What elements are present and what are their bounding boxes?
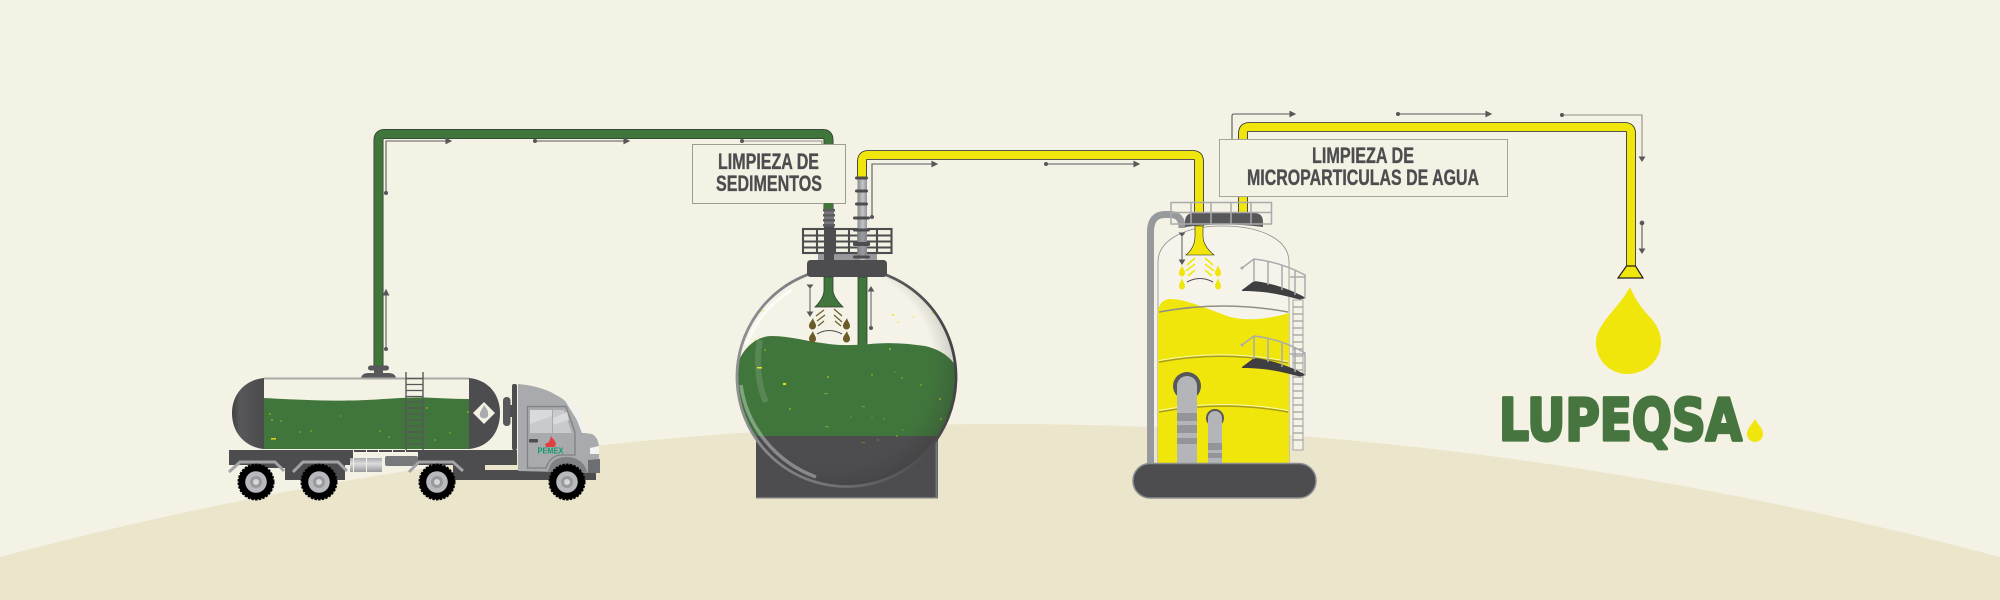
ladder — [406, 372, 423, 450]
inner return pipe — [858, 277, 867, 347]
tower cap — [1185, 213, 1263, 227]
outlet collar base — [818, 254, 877, 262]
top fitting — [361, 366, 396, 378]
door handle — [529, 439, 538, 442]
sphere contents — [738, 336, 955, 486]
yellow pipe: vessel to tower — [862, 155, 1199, 226]
yellow pipes through cap — [1195, 197, 1247, 213]
icon: large yellow drop — [1596, 287, 1661, 374]
tank end caps — [232, 378, 264, 449]
tower base — [1133, 464, 1316, 498]
side pipe — [1150, 214, 1182, 463]
small internal pipe — [1206, 409, 1224, 463]
ground hill — [0, 424, 2000, 600]
water drops and spray — [1179, 258, 1221, 290]
large internal pipe — [1173, 372, 1201, 463]
tower body — [1158, 226, 1289, 463]
logo: lupeqsa: LUPEQSA — [1499, 386, 1742, 454]
panel: sediment vessel — [730, 176, 970, 498]
label: limpieza de sedimentos: SEDIMENTOS — [716, 171, 822, 196]
green pipe — [378, 134, 828, 366]
sphere interior — [738, 268, 956, 486]
truck — [229, 366, 600, 500]
yellow pipe: tower to drop — [1243, 127, 1631, 267]
vessel cap — [807, 260, 887, 277]
sphere ring — [737, 268, 956, 486]
ladder — [1293, 300, 1303, 450]
glass specks — [747, 310, 934, 339]
label: limpieza de microparticulas de agua: LIMPIEZA DE — [1312, 143, 1414, 168]
down arrow — [1180, 233, 1184, 264]
pemex logo — [538, 436, 564, 456]
flow arrows — [384, 112, 1644, 350]
vessel stand — [756, 436, 938, 498]
tower liquid — [1158, 299, 1289, 463]
label: limpieza de microparticulas de agua: MICROPARTICULAS DE AGUA — [1247, 165, 1479, 190]
upper platform — [1240, 259, 1306, 300]
hazard diamond — [473, 402, 495, 424]
chassis — [229, 450, 596, 480]
label: limpieza de sedimentos: LIMPIEZA DE — [718, 149, 819, 174]
tank body — [264, 378, 469, 449]
lower platform — [1240, 336, 1306, 376]
up arrow — [868, 287, 874, 330]
label: limpieza de sedimentos — [692, 144, 846, 204]
cab windows — [530, 410, 572, 433]
yellow pipe tail — [1195, 220, 1203, 230]
yellow specks — [754, 339, 942, 437]
fenders — [229, 462, 463, 472]
pemex logo: PEMEX — [538, 446, 564, 456]
spray nozzle — [815, 277, 843, 307]
yellow specks — [265, 407, 469, 458]
tank liquid — [264, 397, 469, 449]
exhaust and filter — [512, 384, 517, 450]
panel: microparticle tower — [1133, 197, 1316, 498]
spray nozzle — [1186, 226, 1214, 255]
tower ribs — [1159, 306, 1288, 412]
green pipe grey section — [823, 203, 835, 260]
glass shading — [738, 268, 956, 486]
wheels — [238, 464, 584, 500]
icon: pipe outlet nozzle — [1618, 266, 1643, 278]
icon: logo drop — [1747, 419, 1763, 442]
cab — [518, 384, 599, 473]
down arrow — [808, 285, 812, 316]
top railing — [1171, 202, 1272, 224]
dim specks — [824, 371, 904, 443]
grating — [803, 229, 892, 253]
fuel tank — [350, 458, 382, 472]
label: limpieza de microparticulas de agua — [1220, 140, 1508, 196]
yellow pipe grey section — [853, 176, 870, 260]
headlight and bumper — [590, 446, 599, 454]
sediment drops and spray — [809, 309, 850, 342]
tool box — [385, 456, 418, 466]
glass highlights — [741, 290, 816, 477]
